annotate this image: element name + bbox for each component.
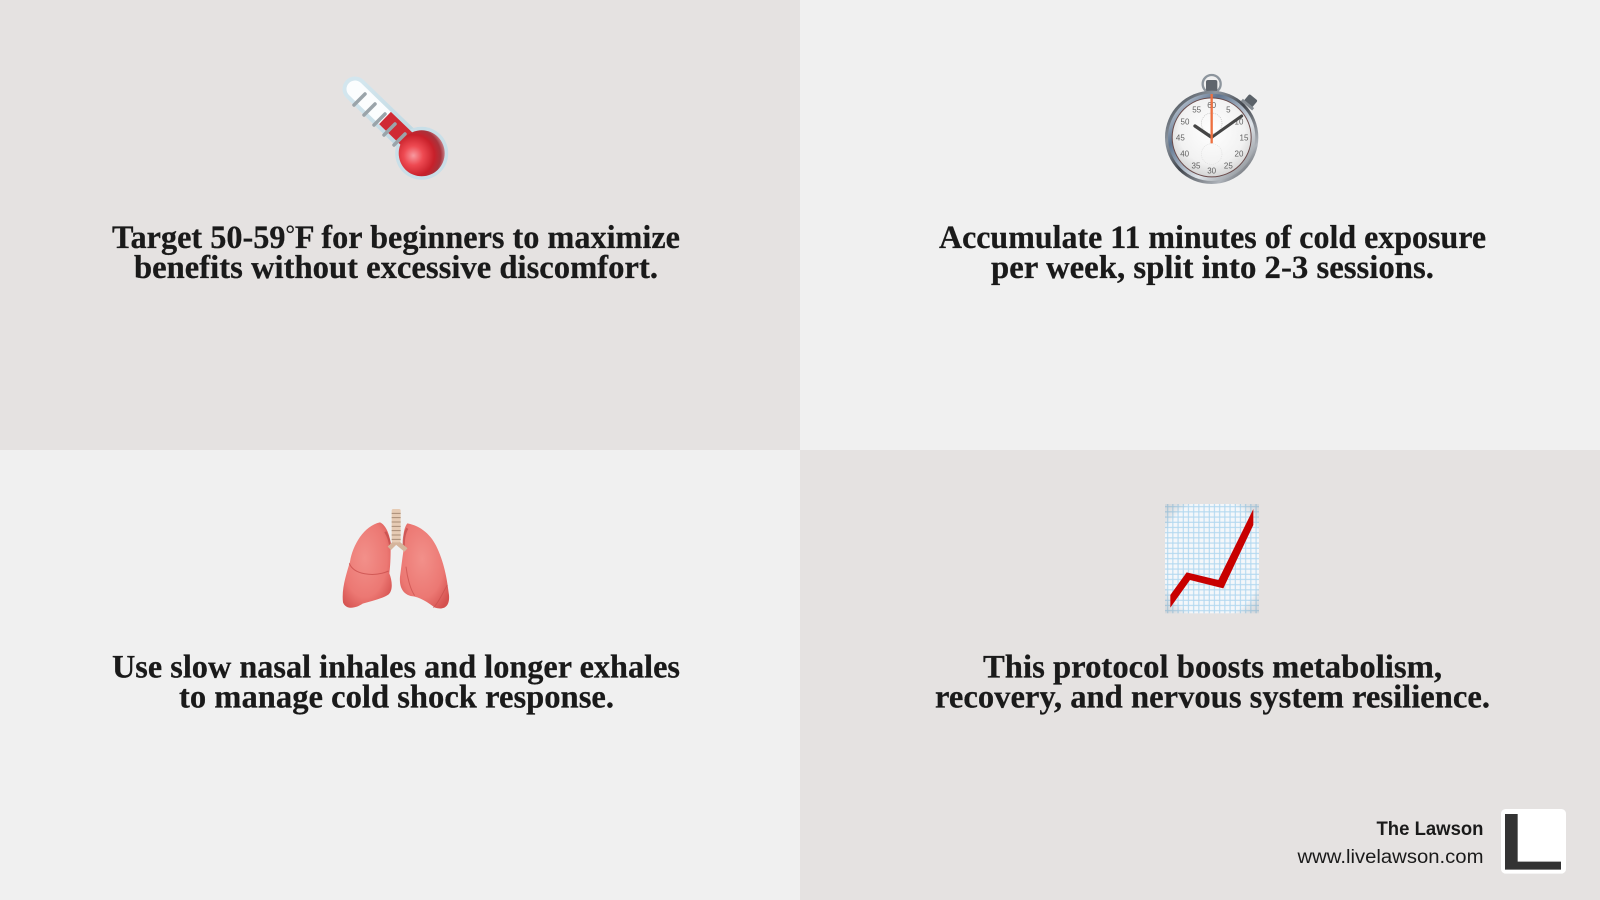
panel background: benefits <box>800 450 1600 900</box>
stopwatch dial numbers: 15 <box>1240 134 1249 143</box>
brand block <box>1296 809 1566 874</box>
text: duration tip: per week, split into 2-3 sessions. <box>991 250 1434 286</box>
icon: thermometer <box>354 89 448 180</box>
panel: water temperature <box>0 0 800 450</box>
stopwatch dial numbers: 60 <box>1207 101 1217 110</box>
icon: lungs <box>343 509 449 608</box>
stopwatch dial numbers: 25 <box>1224 161 1233 170</box>
stopwatch dial numbers: 35 <box>1192 161 1201 170</box>
stopwatch dial numbers: 45 <box>1176 134 1185 143</box>
text: temperature tip <box>112 220 680 286</box>
text: benefits statement <box>935 650 1490 716</box>
panel background: duration <box>800 0 1600 450</box>
stopwatch dial numbers: 40 <box>1180 150 1190 159</box>
text: benefits statement: recovery, and nervous system resilience. <box>935 680 1490 716</box>
icon: rising chart <box>1165 504 1259 613</box>
text: temperature tip: ° <box>285 222 295 248</box>
text: benefits statement: This protocol boosts metabolism, <box>983 650 1442 686</box>
panel background: temperature <box>0 0 800 450</box>
text: breathing tip: Use slow nasal inhales and longer exhales <box>112 650 680 686</box>
stopwatch dial numbers: 50 <box>1181 118 1190 127</box>
panel: breathing <box>0 450 800 900</box>
brand name: The Lawson <box>1376 819 1484 840</box>
website: www.livelawson.com <box>1296 847 1484 868</box>
text: breathing tip <box>112 650 680 716</box>
panel: benefits <box>800 450 1600 900</box>
text: temperature tip: Target 50-59 <box>112 220 290 256</box>
text: temperature tip: F for beginners to maximize <box>295 220 680 256</box>
icon: stopwatch <box>1165 75 1259 184</box>
stopwatch dial numbers: 55 <box>1192 105 1202 114</box>
logo <box>1501 809 1566 874</box>
text: duration tip <box>939 220 1486 286</box>
panel: exposure duration <box>800 0 1600 450</box>
stopwatch dial numbers: 10 <box>1235 118 1244 127</box>
stopwatch dial numbers: 20 <box>1235 150 1244 159</box>
text: breathing tip: to manage cold shock response. <box>179 680 614 716</box>
text: temperature tip: benefits without excessive discomfort. <box>134 250 658 286</box>
stopwatch dial numbers <box>1176 101 1249 175</box>
panel background: breathing <box>0 450 800 900</box>
text: duration tip: Accumulate 11 minutes of cold exposure <box>939 220 1486 256</box>
stopwatch dial numbers: 30 <box>1207 166 1217 175</box>
stopwatch dial numbers: 5 <box>1226 105 1231 114</box>
